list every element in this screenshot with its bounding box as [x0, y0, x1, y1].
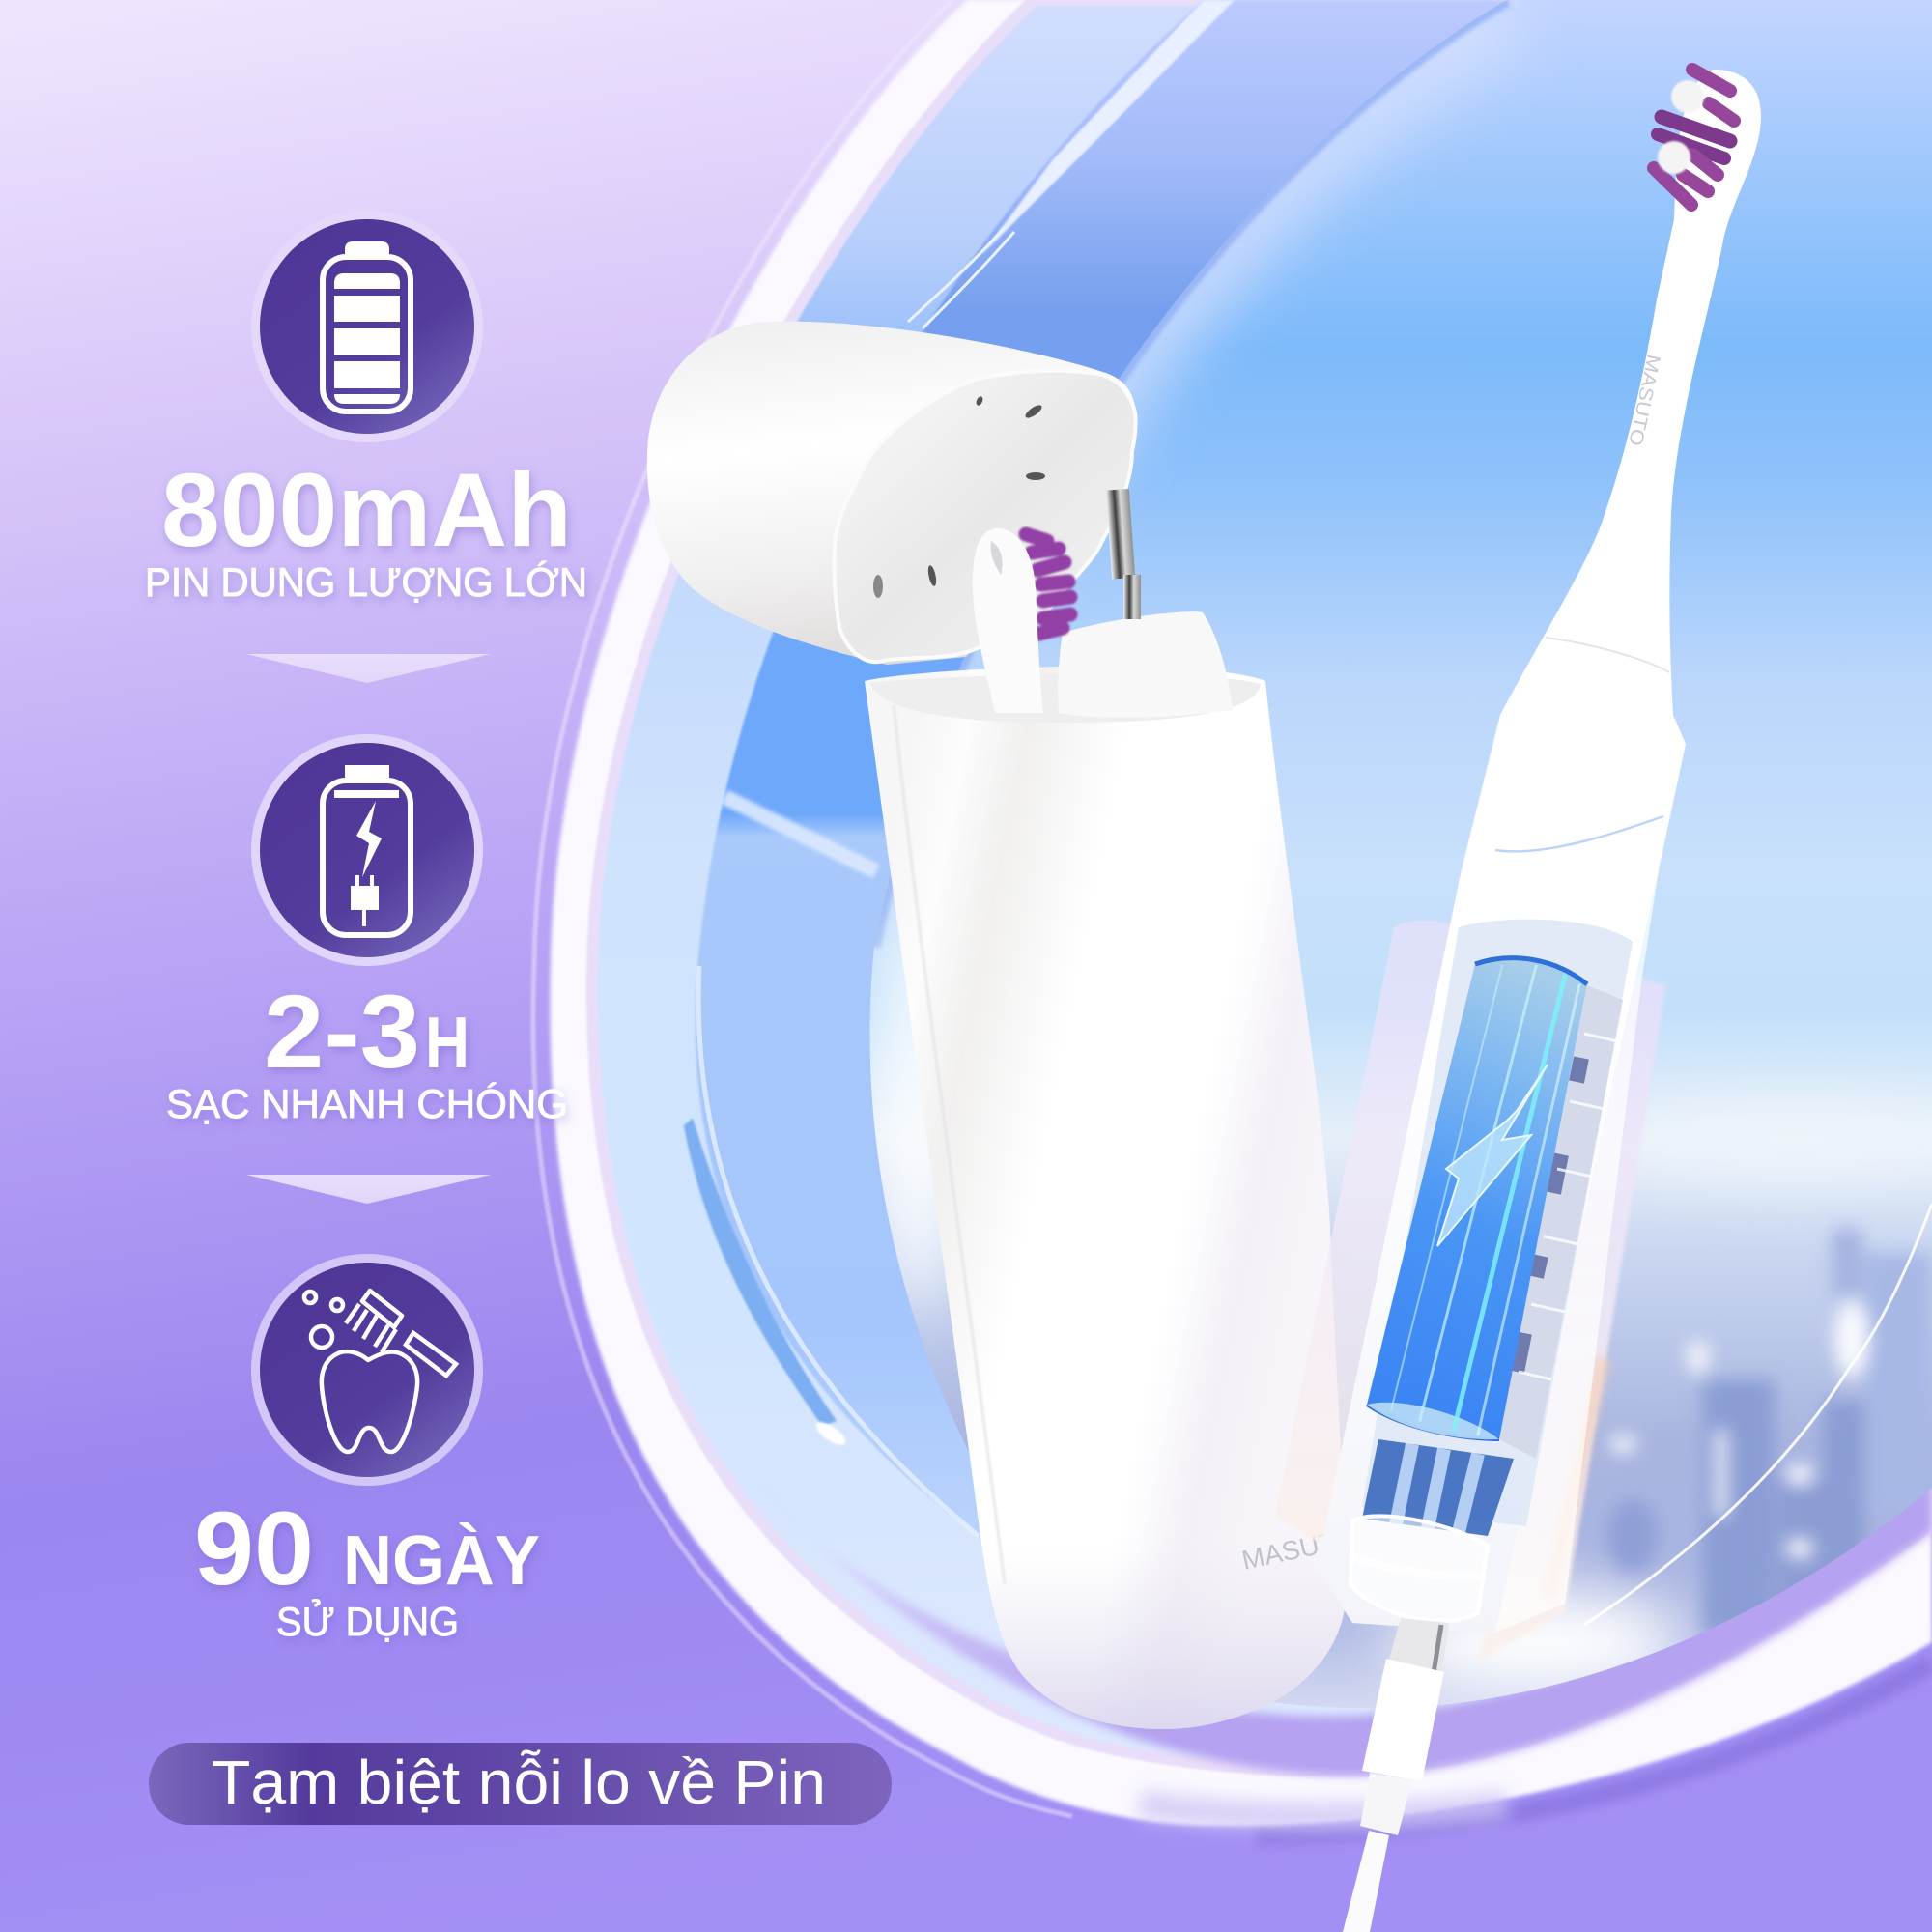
ring white band: [551, 0, 1932, 1826]
caption: pin dung lượng lớn: PIN DUNG LƯỢNG LỚN: [145, 559, 587, 605]
pane star glint: [812, 1418, 849, 1449]
rainbow streak: [1548, 1357, 1604, 1599]
blurred city skyline: [1607, 1229, 1932, 1642]
value: 90 ngày: 90: [194, 1490, 314, 1606]
MASUTO logo on case: MASUTO: [1239, 1522, 1358, 1576]
thin glass lines: [908, 227, 1014, 328]
sky edge glow: [1119, 12, 1520, 483]
right translucent edge: [1495, 744, 1686, 1633]
case bottom lavender shade: [985, 1546, 1345, 1729]
value: 800mAh: 800mAh: [161, 451, 572, 568]
feature 1: battery capacity: [145, 211, 587, 605]
tagline pill: [149, 1743, 892, 1825]
arrow: step one to two: [246, 654, 491, 683]
caption: sạc nhanh chóng: SẠC NHANH CHÓNG: [166, 1081, 568, 1126]
collar line: [1546, 638, 1669, 672]
brush body: [1317, 70, 1761, 1633]
value: 2-3H: 2-3: [264, 973, 420, 1090]
cavity: [1362, 920, 1633, 1526]
left halo panel: [1275, 920, 1463, 1546]
right halo panel: [1478, 976, 1666, 1662]
sky gradient: [773, 0, 1932, 1739]
ring pale glass band: [592, 0, 1932, 1771]
internal cell strip: [1499, 985, 1623, 1459]
icon: tooth and brush: [251, 1254, 483, 1486]
arrow: step two to three: [246, 1175, 491, 1204]
strain relief: [1360, 1773, 1412, 1835]
product: travel case: [647, 322, 1358, 1729]
pane lower curve: [698, 966, 979, 1536]
ring outer glow lines: [533, 0, 1072, 1816]
white bristle tufts: [1658, 80, 1704, 174]
cable: [1343, 1831, 1389, 1932]
icon: lightning bolt: [1437, 1065, 1548, 1246]
case body: [865, 667, 1346, 1729]
city light glows: [1609, 1301, 1869, 1558]
icon: full battery: [251, 211, 483, 442]
horizontal pane bar: [724, 797, 876, 871]
deep blue streak: [686, 1122, 834, 1424]
lid interior: [834, 371, 1136, 662]
lid magnets: [873, 395, 1045, 598]
sky highlight line: [1584, 1204, 1932, 1625]
value: 2-3H: H: [425, 1002, 469, 1083]
ring lower lavender fade: [1140, 1804, 1507, 1817]
usb-c cable: [1343, 1618, 1449, 1932]
caption: sử dụng: SỬ DỤNG: [276, 1598, 459, 1644]
spare brush head in case: [973, 528, 1070, 713]
battery cell: [1367, 958, 1587, 1439]
lid outer: [647, 322, 1136, 665]
case bevel: [894, 705, 1005, 1584]
product: electric toothbrush: [1317, 70, 1761, 1633]
value: 90 ngày: [194, 1490, 540, 1606]
sky edge darker line: [874, 0, 1507, 947]
battery light streaks: [1391, 966, 1579, 1435]
feature 2: fast charging: [166, 734, 568, 1126]
ring dark purple rim: [1256, 1663, 1932, 1835]
clouds: [879, 908, 1932, 1690]
bright glass streak: [980, 0, 1235, 256]
decorative ring: glass arch behind the products: [533, 0, 1932, 1835]
base cap glow: [1350, 1555, 1486, 1576]
bristles: [1654, 70, 1734, 205]
metal connector: [1387, 1618, 1449, 1676]
icon: charging battery: [251, 734, 483, 966]
base cap rings: [1350, 1516, 1488, 1621]
plug housing: [1362, 1659, 1444, 1781]
feature 3: days of use: [194, 1254, 540, 1644]
tagline text: Tạm biệt nỗi lo về Pin: [212, 1747, 826, 1817]
case opening: [869, 674, 1261, 723]
metal pin: [1106, 489, 1141, 619]
translucent halo panels behind brush: [1275, 920, 1666, 1662]
connector shadow edge: [1434, 1625, 1441, 1673]
ring saturated blue pane: [696, 0, 1507, 1565]
translucent section line: [1495, 816, 1663, 851]
sky window with clouds and city: [773, 0, 1932, 1739]
ring lavender band: [753, 1478, 1932, 1776]
inner holder: [1058, 611, 1233, 718]
blue tubes below battery: [1362, 1439, 1514, 1536]
MASUTO logo on brush: MASUTO: [1624, 353, 1664, 447]
value: 90 ngày: NGÀY: [343, 1522, 540, 1600]
